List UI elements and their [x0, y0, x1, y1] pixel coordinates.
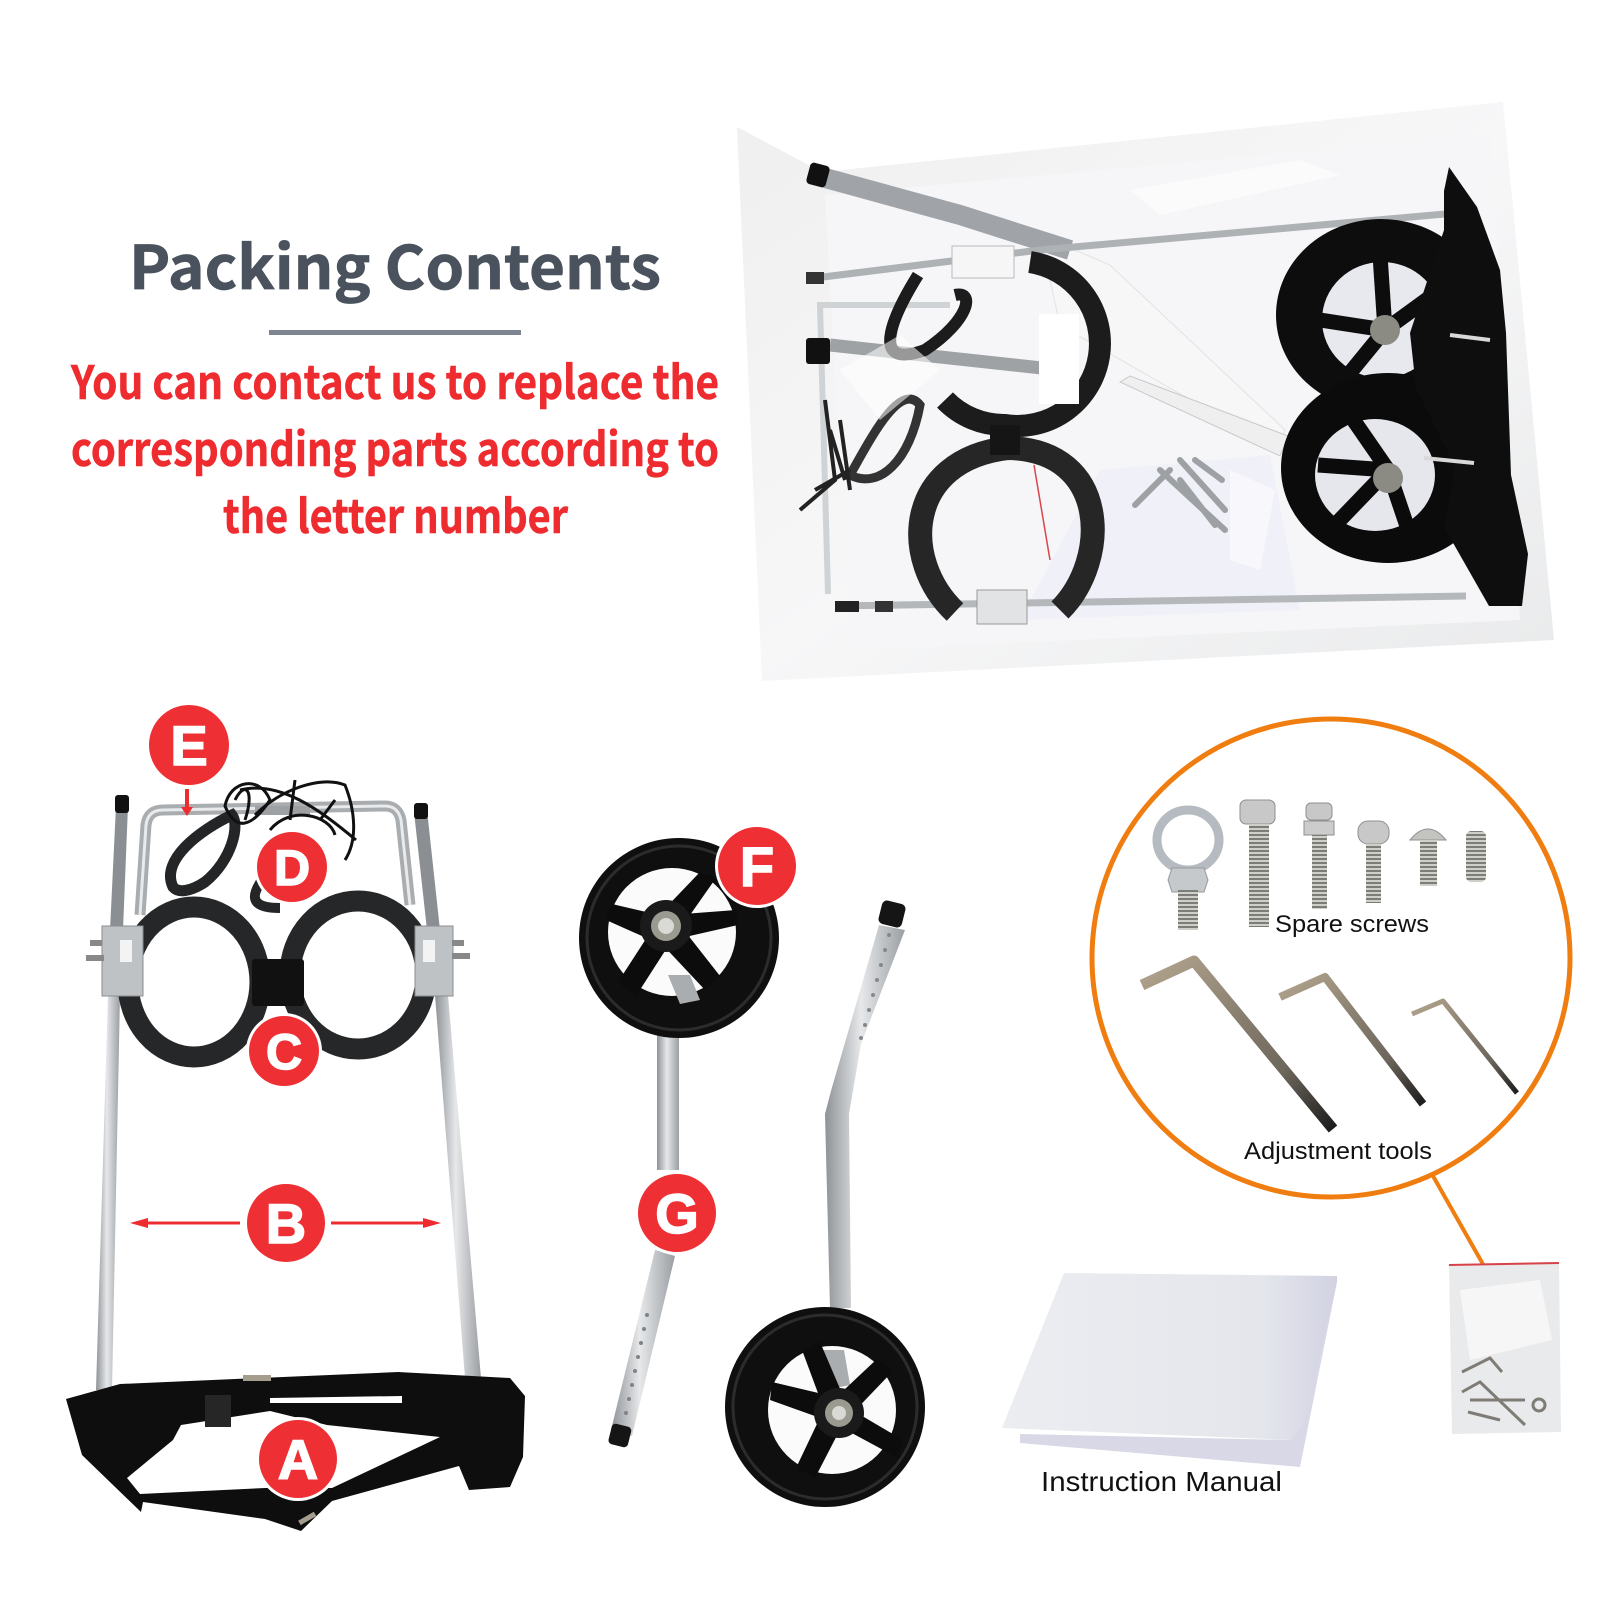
- small cushion loop in bag: [890, 275, 966, 355]
- divider under title: [269, 330, 521, 335]
- padded leg rings: [128, 907, 260, 1057]
- belt buckle: [243, 1375, 271, 1381]
- title: Packing Contents: [129, 220, 661, 307]
- icon: screw 2: [1240, 800, 1275, 927]
- left long rod: [96, 995, 120, 1390]
- red seal line in bag: [1034, 465, 1050, 560]
- wheel F and leg: [579, 838, 779, 1448]
- icon: screw 4: [1358, 821, 1389, 903]
- badge E: E: [170, 714, 208, 777]
- badge C: [246, 1013, 322, 1089]
- upper ring in bag: [945, 262, 1100, 426]
- icon: hex keys: [1142, 961, 1517, 1129]
- icon: screw 5: [1410, 829, 1446, 886]
- black cords: [225, 780, 356, 860]
- panel: assembled cart frame: [66, 780, 525, 1531]
- label: spare screws: Spare screws: [1275, 911, 1429, 938]
- aluminium plate: [255, 806, 310, 815]
- wheel and right leg: [725, 899, 925, 1507]
- badge C: C: [266, 1024, 302, 1080]
- white label in bag: [1039, 314, 1079, 404]
- subtitle text: You can contact us to replace the: [70, 347, 719, 413]
- label: instruction manual: Instruction Manual: [1041, 1466, 1282, 1497]
- badge F: F: [740, 835, 774, 898]
- panel: packed plastic bag: [737, 102, 1554, 681]
- lower ring in bag: [920, 448, 1093, 612]
- icon: set screw: [1466, 831, 1486, 882]
- callout connector: [1433, 1176, 1484, 1266]
- rear frame: [140, 806, 410, 915]
- white aluminium leg in bag: [1040, 235, 1285, 450]
- label B arrows: [130, 1218, 441, 1228]
- wheels in bag: [1276, 219, 1486, 411]
- icon: screw 3: [1304, 803, 1334, 909]
- leg holes: [624, 1313, 649, 1415]
- right clamp: [415, 926, 453, 996]
- icon: eye bolt: [1157, 810, 1219, 930]
- badge F: [715, 824, 799, 908]
- subtitle text: [70, 347, 719, 547]
- spare loop strap: [170, 815, 235, 891]
- badge D: D: [274, 840, 310, 896]
- label E arrow: [181, 789, 193, 816]
- subtitle text: the letter number: [223, 481, 569, 547]
- left upper rod: [110, 806, 128, 930]
- right long rod: [435, 995, 481, 1378]
- badge E: [149, 705, 229, 785]
- straps in bag: [1410, 167, 1528, 606]
- badge G: [635, 1171, 719, 1255]
- label: adjustment tools: Adjustment tools: [1244, 1138, 1432, 1165]
- icon: small hardware bag: [1449, 1262, 1561, 1434]
- left clamp: [102, 926, 143, 996]
- badge B: B: [266, 1192, 306, 1255]
- icon: instruction manual: [1002, 1273, 1337, 1467]
- screws in bag: [1135, 460, 1225, 530]
- orange callout circle: [1092, 719, 1570, 1197]
- subtitle text: corresponding parts according to: [71, 414, 719, 480]
- belt: [66, 1372, 525, 1531]
- badge D: [254, 829, 330, 905]
- rods in bag: [815, 214, 1445, 278]
- badge A: [256, 1417, 340, 1501]
- right upper rod: [414, 810, 440, 930]
- clamps in bag: [952, 246, 1014, 278]
- bag gloss highlights: [840, 160, 1340, 570]
- badge B: [244, 1181, 328, 1265]
- badge G: G: [655, 1182, 699, 1245]
- badge A: A: [278, 1428, 318, 1491]
